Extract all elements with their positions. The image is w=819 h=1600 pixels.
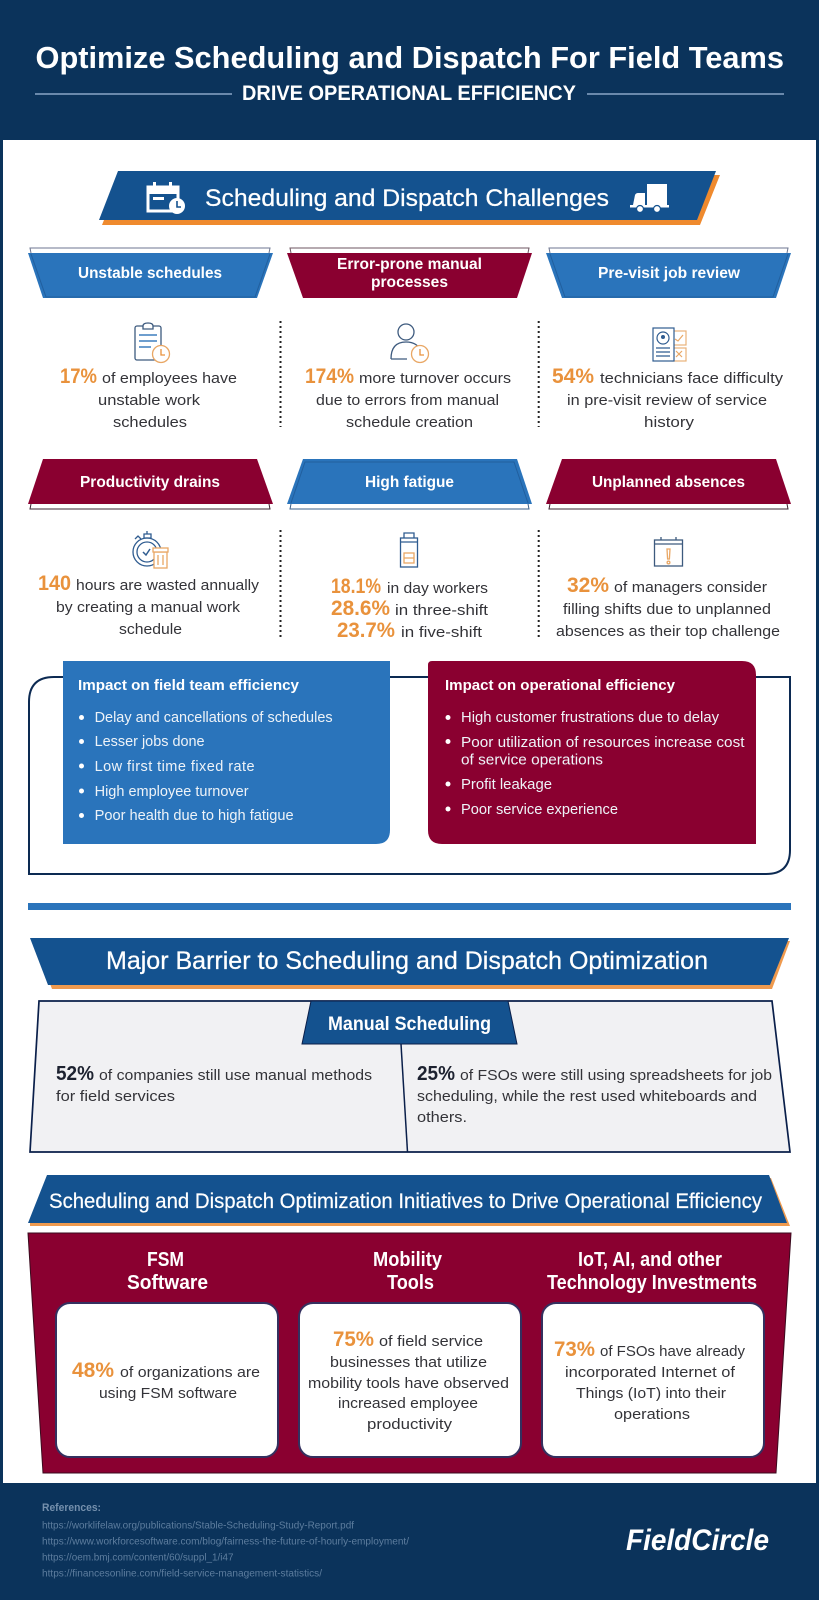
references: [42, 1502, 409, 1580]
banner: optimization initiatives: [28, 1175, 790, 1226]
text: 32% of managers: filling shifts due to unplanned: [563, 601, 771, 618]
card: mobility tools: [299, 1303, 521, 1457]
text: 25% of FSOs: of FSOs were still using spreadsheets for job: [460, 1067, 772, 1084]
heading: mobility tools: Mobility: [373, 1249, 443, 1271]
text: 52% of companies: of companies still use manual methods: [99, 1067, 372, 1084]
text: 17% unstable schedules: schedules: [113, 414, 187, 431]
card: IoT: operations: [614, 1406, 690, 1423]
card: IoT: 73%: [554, 1338, 595, 1361]
text: 174% turnover: 174%: [305, 365, 354, 388]
panel: pre-visit job review: [546, 248, 791, 298]
text: fatigue shift statistics: in five-shift: [401, 624, 483, 641]
references: https://www.workforcesoftware.com/blog/fairness-the-future-of-hourly-employment/: [42, 1536, 409, 1548]
text: 174% turnover: [305, 365, 511, 431]
icon: clipboard with clock: [135, 323, 170, 362]
text: fatigue shift statistics: 28.6%: [331, 597, 390, 620]
panel: unstable schedules: Unstable schedules: [78, 265, 222, 282]
panel: productivity drains: Productivity drains: [80, 474, 220, 491]
header: [35, 40, 784, 105]
text: 32% of managers: absences as their top challenge: [556, 623, 780, 640]
heading: IoT, AI: Technology Investments: [547, 1272, 757, 1294]
text: 54% technicians: in pre-visit review of service: [567, 392, 767, 409]
icon: calendar with clock: [148, 182, 185, 214]
title: Optimize Scheduling and Dispatch For Field Teams: [36, 40, 784, 75]
card: mobility tools: 75%: [333, 1328, 374, 1351]
text: fatigue shift statistics: in three-shift: [395, 602, 489, 619]
text: 140 hours wasted: by creating a manual work: [56, 599, 241, 616]
subtitle: DRIVE OPERATIONAL EFFICIENCY: [242, 82, 576, 105]
tab heading: Manual Scheduling: [328, 1014, 491, 1035]
panel: unplanned absences: Unplanned absences: [592, 474, 745, 491]
heading: mobility tools: Tools: [387, 1272, 434, 1294]
panel: error-prone manual processes: processes: [371, 274, 448, 291]
tab heading: [302, 1001, 517, 1044]
card: IoT: of FSOs have already: [600, 1343, 745, 1360]
banner: optimization initiatives: Scheduling and Dispatch Optimization Initiatives to Drive Operational Efficiency: [49, 1190, 762, 1213]
panel: error-prone manual processes: [287, 248, 532, 298]
text: 54% technicians: history: [644, 414, 695, 431]
panel: impact on field team efficiency: Low first time fixed rate: [95, 759, 255, 775]
text: fatigue shift statistics: in day workers: [387, 580, 488, 597]
panel: impact on operational efficiency: High customer frustrations due to delay: [461, 710, 720, 726]
text: 54% technicians: 54%: [552, 365, 594, 388]
text: 32% of managers: [556, 574, 780, 640]
banner: scheduling and dispatch challenges: Scheduling and Dispatch Challenges: [205, 185, 609, 212]
banner: scheduling and dispatch challenges: [99, 171, 720, 225]
panel: impact on field team efficiency: [63, 661, 390, 844]
text: fatigue shift statistics: [331, 575, 489, 642]
text: 140 hours wasted: [38, 572, 260, 638]
panel: unplanned absences: [546, 459, 791, 509]
panel: impact on operational efficiency: Profit leakage: [461, 777, 552, 793]
card: IoT: [542, 1303, 764, 1457]
heading: mobility tools: [373, 1249, 443, 1294]
card: FSM software: using FSM software: [99, 1385, 237, 1402]
icon: low battery: [400, 533, 418, 567]
impact panel outline: [29, 677, 790, 874]
icon: calendar with exclamation: [654, 537, 682, 566]
text: 17% unstable schedules: 17%: [60, 365, 97, 388]
card: FSM software: of organizations are: [120, 1364, 260, 1381]
text: 54% technicians: [552, 365, 784, 431]
panel: impact on field team efficiency: Delay and cancellations of schedules: [95, 710, 333, 726]
heading: FSM software: [127, 1249, 208, 1294]
card: mobility tools: increased employee: [338, 1395, 478, 1412]
text: 17% unstable schedules: [60, 365, 237, 431]
banner: major barrier: Major Barrier to Scheduling and Dispatch Optimization: [106, 947, 708, 975]
heading: IoT, AI: [547, 1249, 757, 1294]
card: IoT: incorporated Internet of: [565, 1364, 736, 1381]
text: 140 hours wasted: schedule: [119, 621, 182, 638]
divider dots: [280, 321, 282, 427]
panel: impact on operational efficiency: [428, 661, 756, 844]
panel: pre-visit job review: Pre-visit job review: [598, 265, 741, 282]
text: 25% of FSOs: others.: [417, 1109, 467, 1126]
text: 140 hours wasted: hours are wasted annually: [76, 577, 260, 594]
heading: FSM software: FSM: [147, 1249, 184, 1271]
text: 174% turnover: due to errors from manual: [316, 392, 499, 409]
panel: high fatigue: High fatigue: [365, 474, 454, 491]
panel: error-prone manual processes: Error-prone manual: [337, 256, 482, 273]
panel: impact on field team efficiency: High employee turnover: [95, 784, 249, 800]
card: mobility tools: productivity: [367, 1416, 453, 1433]
card: FSM software: [56, 1303, 278, 1457]
panel: impact on field team efficiency: Poor health due to high fatigue: [95, 808, 294, 824]
text: 54% technicians: technicians face difficulty: [600, 370, 784, 387]
text: 17% unstable schedules: of employees have: [102, 370, 237, 387]
panel: impact on operational efficiency: Poor service experience: [461, 802, 618, 818]
panel: high fatigue: [287, 459, 532, 509]
heading: FSM software: Software: [127, 1272, 208, 1294]
references: https://oem.bmj.com/content/60/suppl_1/i47: [42, 1552, 234, 1564]
icon: stopwatch with trash can: [133, 531, 168, 568]
icon: person with clock: [391, 324, 428, 362]
logo: FieldCircle: FieldCircle: [626, 1524, 769, 1557]
text: 140 hours wasted: 140: [38, 572, 71, 595]
panel: impact on operational efficiency: Poor utilization of resources increase cost: [461, 735, 744, 751]
text: fatigue shift statistics: 23.7%: [337, 619, 395, 642]
text: 32% of managers: of managers consider: [614, 579, 767, 596]
text: 25% of FSOs: 25%: [417, 1063, 455, 1085]
panel: initiatives: [28, 1233, 791, 1473]
text: fatigue shift statistics: 18.1%: [331, 575, 381, 598]
card: mobility tools: mobility tools have observed: [308, 1375, 509, 1392]
references: https://worklifelaw.org/publications/Stable-Scheduling-Study-Report.pdf: [42, 1520, 354, 1532]
heading: IoT, AI: IoT, AI, and other: [578, 1249, 722, 1271]
text: 17% unstable schedules: unstable work: [98, 392, 201, 409]
text: 52% of companies: [56, 1063, 372, 1105]
text: 25% of FSOs: [417, 1063, 772, 1126]
text: 174% turnover: more turnover occurs: [359, 370, 511, 387]
text: 25% of FSOs: scheduling, while the rest used whiteboards and: [417, 1088, 757, 1105]
panel: impact on operational efficiency: of service operations: [461, 752, 603, 768]
panel: impact on field team efficiency: Lesser jobs done: [95, 734, 205, 750]
divider dots: [280, 530, 282, 638]
text: 32% of managers: 32%: [567, 574, 609, 597]
text: 52% of companies: for field services: [56, 1088, 175, 1105]
panel: productivity drains: [28, 459, 273, 509]
card: FSM software: 48%: [72, 1359, 114, 1382]
panel: impact on operational efficiency: Impact on operational efficiency: [445, 677, 676, 694]
references: https://financesonline.com/field-service-management-statistics/: [42, 1568, 322, 1580]
panel: unstable schedules: [28, 248, 273, 298]
section divider: [28, 903, 791, 910]
panel: manual scheduling: [30, 1001, 790, 1152]
text: 52% of companies: 52%: [56, 1063, 94, 1085]
card: IoT: Things (IoT) into their: [576, 1385, 726, 1402]
card: mobility tools: of field service: [379, 1333, 483, 1350]
icon: profile document with checklist: [653, 328, 686, 361]
panel: impact on field team efficiency: Impact on field team efficiency: [78, 677, 300, 694]
card: mobility tools: businesses that utilize: [330, 1354, 487, 1371]
icon: truck: [630, 184, 669, 212]
banner: major barrier: [30, 938, 790, 989]
references: References:: [42, 1502, 101, 1514]
text: 174% turnover: schedule creation: [346, 414, 473, 431]
